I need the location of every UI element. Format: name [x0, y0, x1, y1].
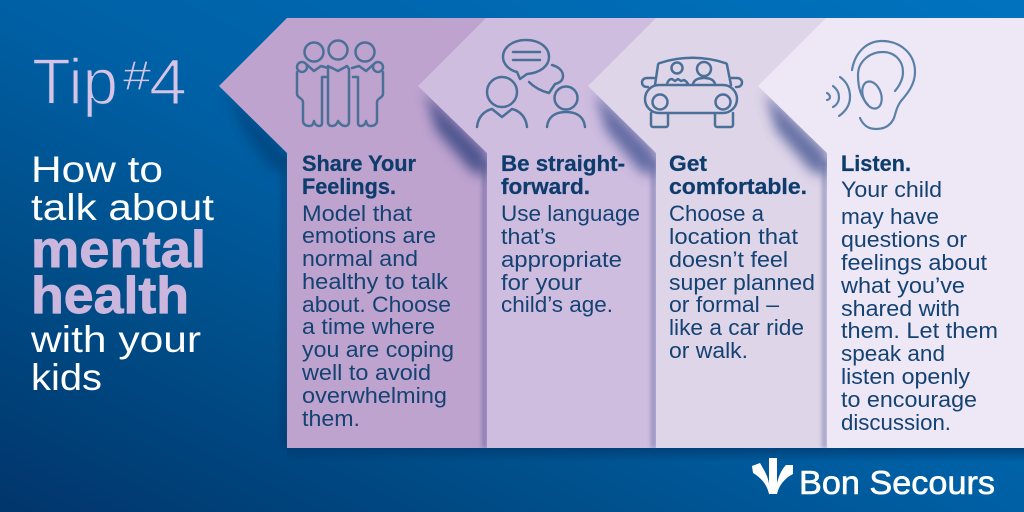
text: listen body: may have [841, 204, 939, 229]
text: share your feelings body: well to avoid [301, 360, 431, 385]
panel: share your feelings [219, 18, 1024, 448]
text: listen body: shared with [841, 296, 960, 321]
text: listen body: to encourage [841, 387, 977, 412]
text: share your feelings body: overwhelming [302, 383, 447, 408]
heading: get comfortable [669, 151, 807, 199]
text: get comfortable body: or walk. [669, 338, 748, 363]
text: be straight-forward body: for your [501, 270, 582, 295]
text: listen body: questions or [841, 227, 967, 252]
panel: get comfortable [588, 18, 1024, 448]
panel: listen [758, 18, 1024, 448]
text: share your feelings body: healthy to talk [302, 269, 449, 294]
icon: three people [297, 40, 383, 126]
title: with your [30, 319, 201, 360]
logo: Bon Secours [752, 458, 995, 501]
text: listen body: feelings about [841, 250, 987, 275]
text: be straight-forward body: child’s age. [501, 292, 613, 317]
text: get comfortable body: or formal – [669, 292, 780, 317]
heading: get comfortable: comfortable. [669, 174, 807, 199]
panel: be straight-forward [418, 18, 1024, 448]
text: listen body: discussion. [841, 410, 951, 435]
tip number: # [123, 52, 152, 99]
heading: share your feelings: Share Your [302, 151, 416, 176]
text: share your feelings body: them. [302, 406, 360, 431]
text: listen body: speak and [841, 341, 945, 366]
text: listen body: listen openly [841, 364, 970, 389]
text: listen body: what you’ve [840, 273, 965, 298]
text: share your feelings body: Model that [302, 201, 412, 226]
text: be straight-forward body: Use language [501, 201, 640, 226]
text: share your feelings body [301, 201, 454, 431]
heading: be straight-forward: forward. [501, 174, 590, 199]
heading: share your feelings [302, 151, 416, 199]
heading: share your feelings: Feelings. [302, 174, 396, 199]
title: talk about [31, 187, 215, 228]
text: share your feelings body: about. Choose [302, 292, 451, 317]
text: get comfortable body: location that [669, 224, 798, 249]
title: kids [31, 357, 102, 398]
text: get comfortable body [669, 201, 815, 363]
icon: car with passengers [642, 58, 742, 127]
text: be straight-forward body [501, 201, 640, 317]
text: share your feelings body: a time where [302, 314, 435, 339]
tip number [32, 45, 187, 118]
title [30, 149, 215, 398]
title: mental [31, 221, 206, 279]
icon: two people talking [477, 40, 585, 127]
text: share your feelings body: emotions are [302, 223, 436, 248]
title: health [31, 267, 189, 325]
heading: get comfortable: Get [669, 151, 708, 176]
title: How to [31, 149, 163, 190]
text: listen body [840, 177, 998, 435]
text: listen body: Your child [841, 177, 942, 202]
text: share your feelings body: normal and [302, 246, 418, 271]
icon: ear with sound waves [827, 41, 915, 129]
icon: logo mark [752, 458, 793, 494]
text: get comfortable body: like a car ride [669, 315, 804, 340]
text: get comfortable body: Choose a [669, 201, 765, 226]
tip number: 4 [149, 45, 187, 118]
text: listen body: them. Let them [841, 318, 998, 343]
text: be straight-forward body: that’s [501, 224, 556, 249]
text: get comfortable body: doesn’t feel [669, 247, 788, 272]
text: get comfortable body: super planned [669, 270, 815, 295]
heading: be straight-forward [501, 151, 625, 199]
text: share your feelings body: you are coping [302, 337, 454, 362]
tip number: Tip [32, 45, 118, 118]
heading: be straight-forward: Be straight- [501, 151, 625, 176]
panel shadows on background [226, 90, 1024, 462]
heading: listen: Listen. [841, 151, 911, 176]
text: be straight-forward body: appropriate [501, 247, 622, 272]
logo: Bon Secours: Bon Secours [799, 464, 995, 501]
